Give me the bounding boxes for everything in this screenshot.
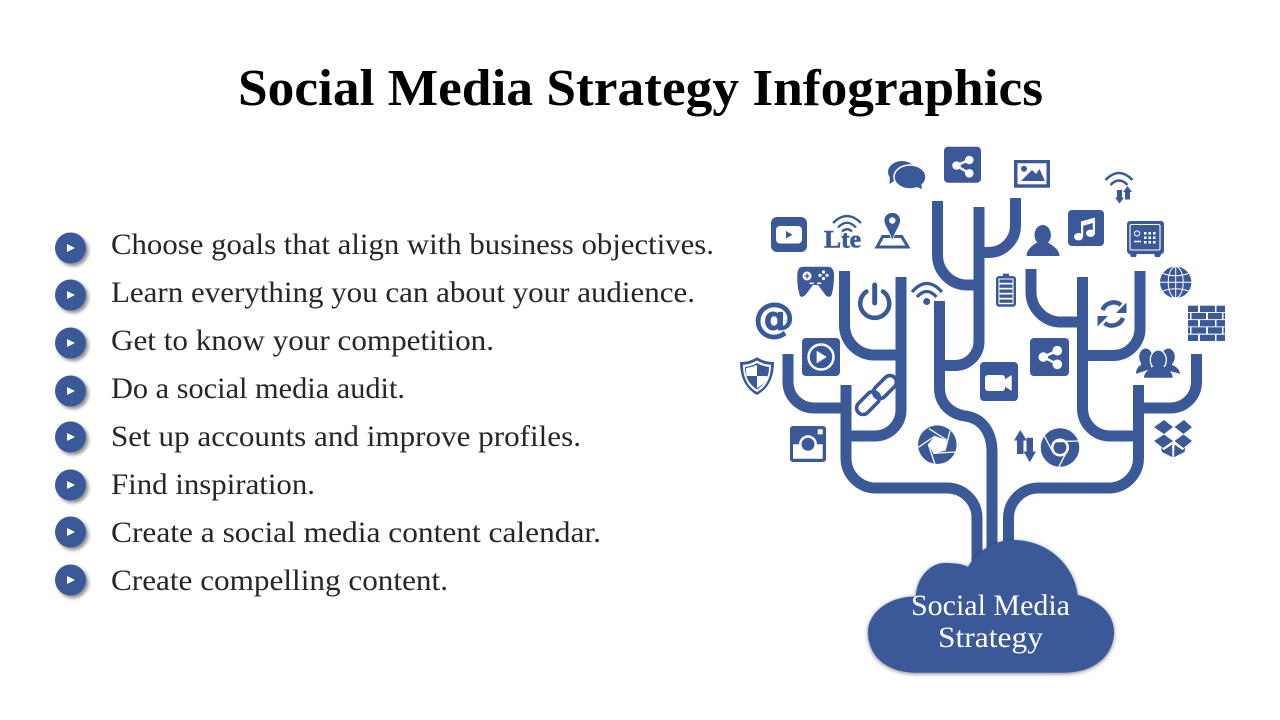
cloud label [911,589,1070,654]
icon: video player [771,217,807,252]
icons [740,147,1225,467]
tree branches [788,198,1196,570]
title: Social Media Strategy Infographics [238,60,1043,117]
icon: at sign: @ [754,294,794,342]
icon: users [1136,348,1180,378]
icon: dropbox [1154,420,1192,457]
list item 7: Create a social media content calendar. [111,516,601,549]
cloud label: Social Media [911,589,1070,622]
icon: battery [996,274,1016,307]
bullet list [55,228,714,597]
icon: share top [944,147,981,183]
icon: camera app [790,426,826,462]
icon: person [1026,225,1060,256]
cloud [868,540,1114,673]
icon: aperture [918,425,957,464]
icon: chrome [1041,428,1079,467]
icon: link [854,373,899,417]
icon: wifi [912,284,942,305]
icon: globe [1160,267,1191,298]
icon: map pin [877,212,908,247]
cloud label: Strategy [938,621,1043,654]
list item 4: Do a social media audit. [111,372,405,405]
icon: gamepad [797,267,834,297]
list item 3: Get to know your competition. [111,324,494,357]
icon: video camera [980,362,1018,401]
icon: play circle [802,338,840,376]
icon: safe [1127,221,1164,257]
icon: sync [1098,302,1126,326]
icon: power [860,285,889,318]
list item 6: Find inspiration. [111,468,315,501]
list item 5: Set up accounts and improve profiles. [111,420,581,453]
icon: chat bubbles [888,161,926,189]
icon: brick wall [1188,306,1225,341]
list item 2: Learn everything you can about your audience. [111,276,695,309]
icon: up down arrows [1014,430,1036,462]
list item 8: Create compelling content. [111,564,448,597]
icon: wifi transfer [1106,173,1132,204]
icon: music [1068,210,1104,246]
icon: LTE signal: Lte [824,226,861,254]
icon: shield [740,357,774,395]
list item 1: Choose goals that align with business objectives. [111,228,714,261]
icon: share lower [1030,338,1069,376]
icon: image [1014,160,1050,188]
